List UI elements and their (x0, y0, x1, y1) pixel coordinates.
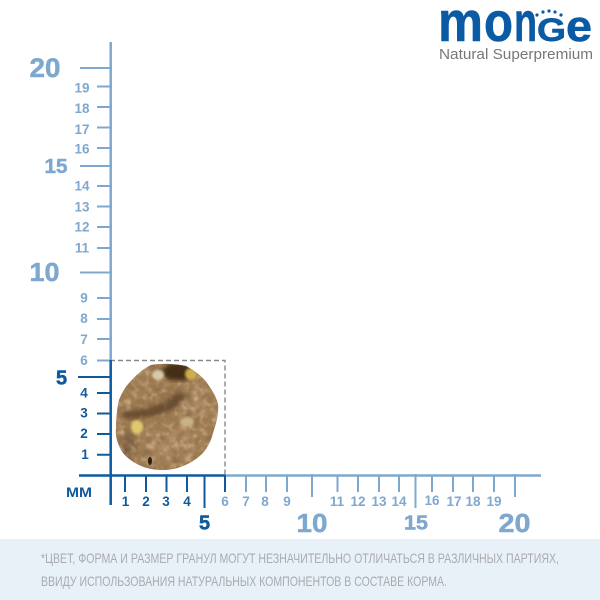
light horizontal labels: 11 (330, 494, 345, 509)
light vertical labels: 7 (80, 332, 88, 347)
dark vertical labels: 2 (80, 426, 88, 441)
light horizontal labels: 15 (404, 512, 428, 534)
light vertical labels: 19 (74, 80, 90, 96)
light horizontal labels: 18 (465, 494, 481, 509)
light vertical labels: 16 (74, 142, 90, 156)
light horizontal scale (225, 474, 541, 508)
dark horizontal labels: 2 (142, 494, 150, 509)
light vertical labels: 13 (74, 200, 90, 214)
light horizontal labels: 14 (391, 494, 407, 509)
unit label: ММ (66, 484, 92, 500)
light horizontal labels: 8 (261, 494, 269, 509)
dark horizontal labels (122, 494, 210, 534)
dark vertical labels: 4 (80, 386, 88, 400)
light horizontal labels: 19 (486, 494, 502, 509)
light vertical labels: 14 (74, 178, 90, 194)
light horizontal labels: 16 (424, 493, 440, 508)
dark vertical labels: 5 (56, 368, 67, 390)
light horizontal labels: 20 (498, 508, 530, 538)
kibble photo (116, 364, 218, 470)
footer note (41, 550, 559, 589)
footer note: ВВИДУ ИСПОЛЬЗОВАНИЯ НАТУРАЛЬНЫХ КОМПОНЕНТОВ В СОСТАВЕ КОРМА. (41, 573, 447, 589)
light vertical labels: 17 (74, 122, 90, 137)
dark vertical labels: 1 (81, 447, 89, 462)
logo tagline: Natural Superpremium (439, 47, 593, 63)
light horizontal labels: 17 (446, 494, 462, 509)
light horizontal labels: 9 (283, 494, 291, 509)
light horizontal labels: 12 (350, 494, 366, 509)
logo wordmark: e (566, 2, 592, 51)
light vertical labels: 18 (74, 101, 90, 116)
light horizontal labels: 10 (296, 508, 328, 538)
logo stars (535, 9, 563, 17)
dark horizontal labels: 3 (162, 494, 170, 509)
dark vertical labels (56, 368, 89, 462)
dark axes 0 to 6 (78, 360, 225, 508)
dark horizontal labels: 1 (122, 494, 130, 509)
light vertical labels (30, 53, 90, 368)
logo wordmark (438, 0, 592, 54)
light horizontal labels: 7 (242, 494, 250, 509)
footer band (0, 539, 600, 600)
dark horizontal labels: 4 (183, 494, 191, 509)
logo wordmark: G (537, 12, 566, 48)
light vertical labels: 9 (80, 290, 88, 306)
dark vertical labels: 3 (80, 406, 88, 420)
light vertical labels: 15 (44, 156, 68, 178)
light vertical labels: 10 (30, 257, 60, 287)
dark horizontal labels: 5 (199, 512, 210, 534)
light vertical labels: 11 (75, 240, 90, 256)
light horizontal labels: 13 (371, 494, 387, 509)
light vertical labels: 20 (30, 53, 60, 83)
logo: Monge Natural Superpremium (438, 0, 593, 63)
dashed size guide (110, 360, 225, 475)
light vertical scale (80, 42, 112, 360)
light horizontal labels (221, 493, 530, 538)
light vertical labels: 12 (74, 220, 90, 234)
light vertical labels: 8 (80, 311, 88, 326)
light horizontal labels: 6 (221, 494, 229, 509)
light vertical labels: 6 (80, 353, 88, 368)
